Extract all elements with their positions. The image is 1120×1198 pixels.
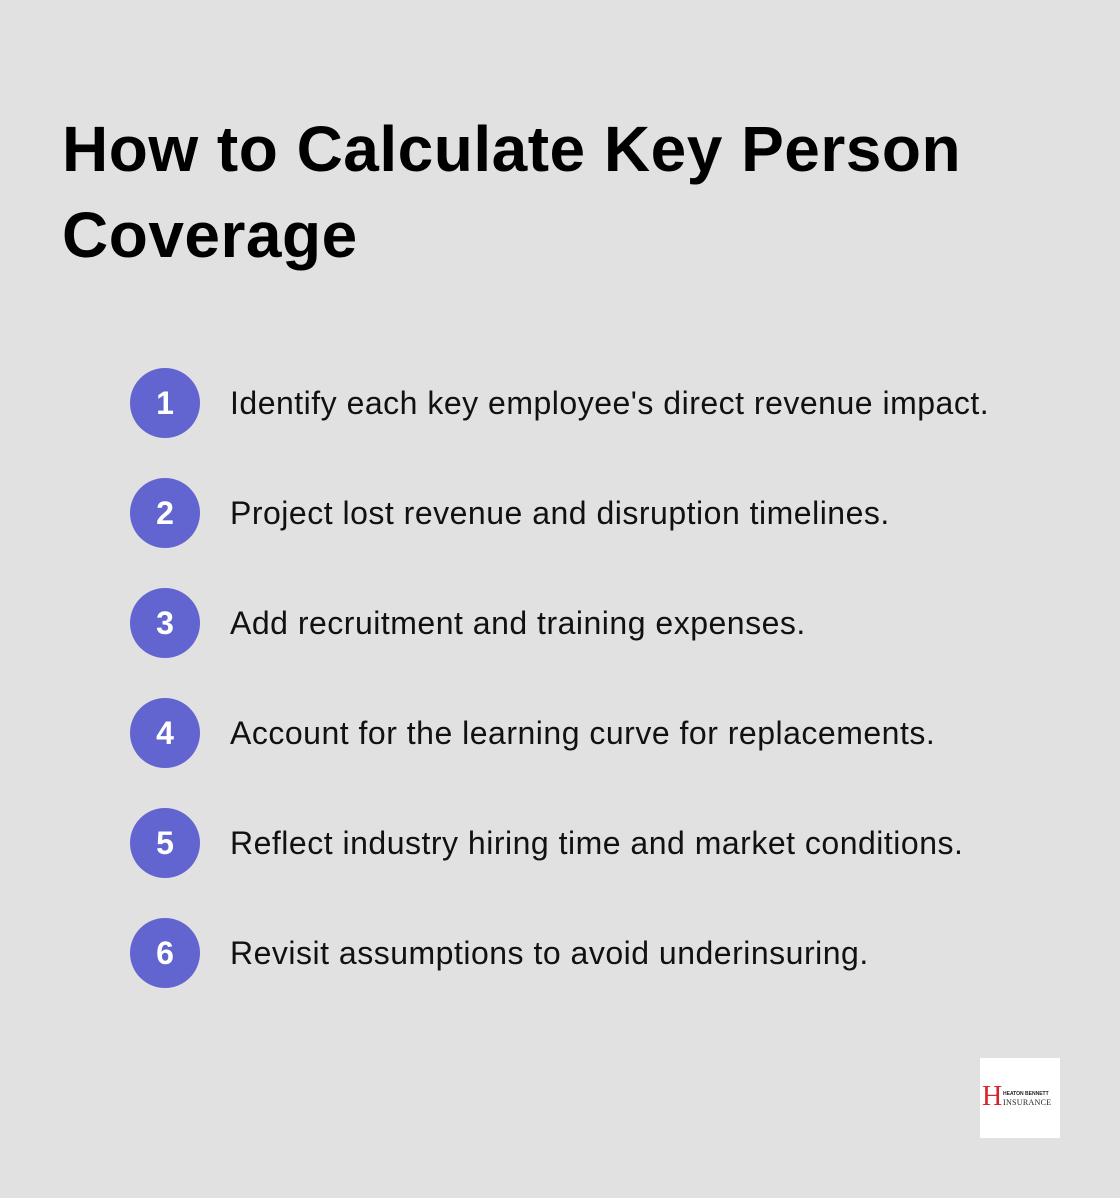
title — [62, 113, 961, 271]
step 5 — [130, 808, 963, 878]
step 2: 2 — [156, 495, 174, 531]
title: How to Calculate Key Person — [62, 113, 961, 185]
logo — [980, 1058, 1060, 1138]
step 5: 5 — [156, 825, 174, 861]
step 5: Reflect industry hiring time and market conditions. — [230, 825, 963, 861]
step 2: Project lost revenue and disruption timelines. — [230, 495, 890, 531]
step 4: 4 — [156, 715, 174, 751]
step 3: 3 — [156, 605, 174, 641]
step 6: 6 — [156, 935, 174, 971]
step 1: Identify each key employee's direct revenue impact. — [230, 385, 989, 421]
logo: HEATON BENNETT — [1003, 1091, 1049, 1097]
step 1 — [130, 368, 989, 438]
logo: INSURANCE — [1003, 1098, 1051, 1107]
step 6 — [130, 918, 869, 988]
step 4: Account for the learning curve for replacements. — [230, 715, 935, 751]
step 3 — [130, 588, 806, 658]
logo: H — [982, 1081, 1002, 1112]
step 4 — [130, 698, 935, 768]
title: Coverage — [62, 199, 358, 271]
step 1: 1 — [156, 385, 174, 421]
step 3: Add recruitment and training expenses. — [230, 605, 806, 641]
step 2 — [130, 478, 890, 548]
step 6: Revisit assumptions to avoid underinsuring. — [230, 935, 869, 971]
